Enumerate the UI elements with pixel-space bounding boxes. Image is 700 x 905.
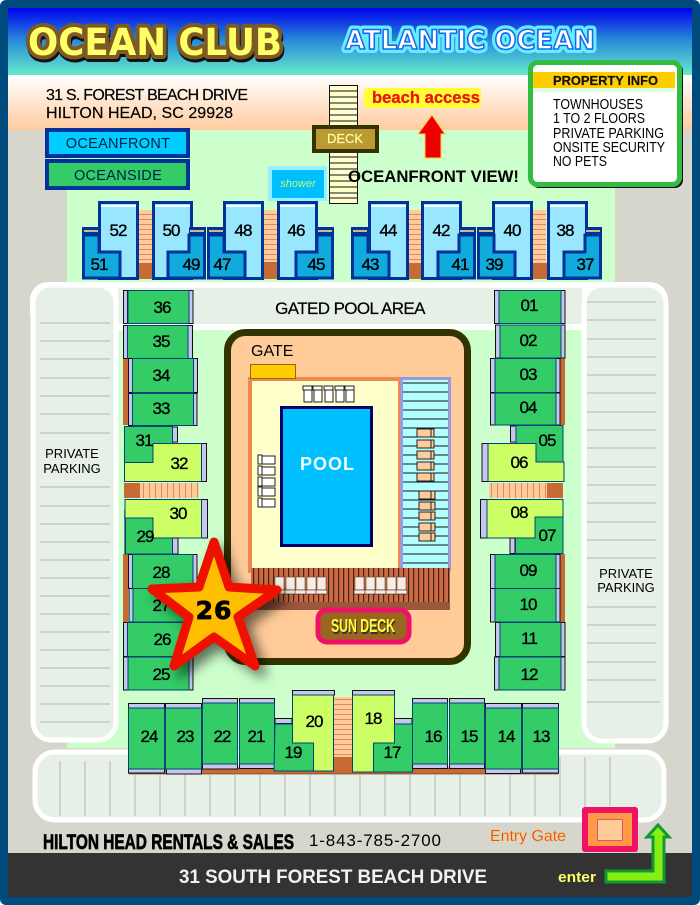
loungers: right bbox=[417, 429, 435, 541]
units 52 and 51: 51 bbox=[91, 255, 108, 274]
unit 20 bbox=[292, 690, 334, 771]
unit 26: 26 bbox=[154, 630, 171, 649]
unit 15 bbox=[450, 698, 484, 768]
units 38 and 37: 37 bbox=[577, 255, 594, 274]
water feature strip bbox=[402, 378, 450, 570]
unit 07 bbox=[510, 517, 563, 554]
units 42 and 41: 41 bbox=[452, 255, 469, 274]
heading: Atlantic Ocean: ATLANTIC OCEAN bbox=[345, 25, 595, 56]
legend: oceanside bbox=[47, 161, 188, 188]
unit 13 bbox=[522, 704, 558, 773]
unit 01: 01 bbox=[521, 296, 538, 315]
unit 14 bbox=[486, 704, 522, 774]
star marker: unit 26 bbox=[152, 542, 277, 666]
right column units bbox=[480, 290, 565, 690]
pool: POOL bbox=[300, 454, 354, 474]
unit 06: 06 bbox=[511, 453, 528, 472]
left private parking: PARKING bbox=[43, 461, 101, 476]
unit 13: 13 bbox=[533, 727, 550, 746]
unit 05: 05 bbox=[539, 431, 556, 450]
unit 15: 15 bbox=[461, 727, 478, 746]
panel: property info: 1 TO 2 FLOORS bbox=[553, 110, 645, 127]
units 46 and 45: 46 bbox=[288, 221, 305, 240]
units 50 and 49: 49 bbox=[183, 255, 200, 274]
title: Ocean Club: OCEAN CLUB bbox=[28, 21, 282, 64]
unit 28 bbox=[128, 554, 197, 588]
right private parking: PARKING bbox=[597, 580, 655, 595]
unit 34: 34 bbox=[153, 366, 170, 385]
unit 11 bbox=[496, 622, 565, 656]
unit 17: 17 bbox=[384, 743, 401, 762]
unit 23 bbox=[166, 704, 202, 774]
unit 32 bbox=[124, 444, 206, 482]
unit 31 bbox=[124, 426, 178, 462]
sun deck sign: SUN DECK bbox=[332, 618, 396, 638]
unit 36: 36 bbox=[154, 298, 171, 317]
unit 02: 02 bbox=[520, 331, 537, 350]
unit 25: 25 bbox=[153, 665, 170, 684]
unit 01 bbox=[494, 290, 565, 324]
unit 17 bbox=[374, 718, 412, 772]
unit 33 bbox=[128, 394, 197, 426]
unit 12: 12 bbox=[521, 665, 538, 684]
company name: HILTON HEAD RENTALS & SALES bbox=[43, 831, 294, 854]
legend: oceanfront bbox=[47, 130, 188, 156]
gated pool area band bbox=[30, 282, 668, 330]
unit 16: 16 bbox=[425, 727, 442, 746]
unit 24: 24 bbox=[141, 727, 158, 746]
deck sign: DECK bbox=[327, 131, 363, 146]
panel: property info: PROPERTY INFO bbox=[553, 74, 658, 88]
boardwalk bbox=[330, 86, 358, 204]
deck sign bbox=[314, 127, 377, 151]
units 50 and 49 bbox=[154, 202, 206, 278]
unit 32: 32 bbox=[171, 454, 188, 473]
unit 14: 14 bbox=[498, 727, 515, 746]
unit 19 bbox=[274, 718, 314, 771]
unit 28: 28 bbox=[153, 563, 170, 582]
loungers: top bbox=[303, 386, 354, 402]
panel: property info bbox=[530, 62, 683, 188]
address bbox=[46, 87, 248, 122]
unit 02 bbox=[496, 325, 565, 358]
unit 21: 21 bbox=[248, 727, 265, 746]
units 44 and 43: 44 bbox=[380, 221, 397, 240]
gate label bbox=[250, 343, 296, 378]
unit 04: 04 bbox=[520, 398, 537, 417]
units 48 and 47 bbox=[207, 202, 262, 278]
panel: property info: TOWNHOUSES bbox=[553, 96, 643, 113]
entry gate label: Entry Gate bbox=[490, 828, 566, 845]
phone number: 1-843-785-2700 bbox=[309, 831, 441, 850]
unit 03 bbox=[490, 358, 560, 392]
unit 23: 23 bbox=[177, 727, 194, 746]
gated pool area band: GATED POOL AREA bbox=[275, 299, 426, 318]
unit 35: 35 bbox=[153, 332, 170, 351]
wooden deck bbox=[251, 568, 450, 610]
unit 26 bbox=[124, 622, 188, 656]
heading: Atlantic Ocean: ATLANTIC OCEAN bbox=[345, 25, 595, 56]
beach gradient band bbox=[8, 75, 692, 130]
unit 20: 20 bbox=[306, 712, 323, 731]
units 44 and 43: 43 bbox=[362, 255, 379, 274]
address: HILTON HEAD, SC 29928 bbox=[46, 105, 233, 122]
icon: red arrow bbox=[418, 115, 445, 158]
panel: property info: NO PETS bbox=[553, 153, 607, 170]
units 50 and 49: 50 bbox=[163, 221, 180, 240]
unit 36 bbox=[124, 290, 193, 324]
left private parking bbox=[33, 285, 116, 740]
legend: oceanside: OCEANSIDE bbox=[74, 168, 162, 184]
unit 18 bbox=[352, 690, 394, 772]
unit 06 bbox=[482, 444, 564, 482]
unit 08: 08 bbox=[511, 503, 528, 522]
unit 10 bbox=[490, 588, 560, 622]
bottom road bar bbox=[8, 853, 692, 897]
bottom parking lot bbox=[35, 752, 664, 820]
unit 25 bbox=[124, 657, 193, 690]
right private parking: PRIVATE bbox=[599, 566, 653, 581]
unit 05 bbox=[510, 426, 563, 462]
units 40 and 39: 39 bbox=[486, 255, 503, 274]
unit 12 bbox=[494, 657, 565, 690]
bottom row units bbox=[128, 690, 558, 774]
pool bbox=[282, 408, 372, 546]
pool compound bbox=[228, 332, 468, 662]
gate label: GATE bbox=[251, 343, 293, 360]
units 38 and 37 bbox=[548, 202, 602, 278]
road name: 31 SOUTH FOREST BEACH DRIVE bbox=[179, 867, 487, 888]
left private parking: PRIVATE bbox=[45, 446, 99, 461]
unit 09 bbox=[490, 554, 560, 588]
ocean gradient band bbox=[8, 8, 692, 75]
top row stairs bbox=[139, 210, 547, 279]
units 52 and 51 bbox=[82, 202, 138, 278]
units 48 and 47: 47 bbox=[214, 255, 231, 274]
unit 22 bbox=[202, 698, 238, 769]
sun deck sign: SUN DECK bbox=[331, 616, 395, 636]
property lawn bbox=[67, 130, 615, 748]
loungers: left bbox=[258, 455, 275, 507]
units 44 and 43 bbox=[351, 202, 408, 278]
panel: property info: PRIVATE PARKING bbox=[553, 125, 664, 142]
shower sign bbox=[268, 166, 327, 201]
unit 31: 31 bbox=[136, 431, 153, 450]
stairs between 30 and 32 bbox=[124, 483, 199, 498]
unit 07: 07 bbox=[539, 526, 556, 545]
unit 09: 09 bbox=[520, 561, 537, 580]
units 40 and 39: 40 bbox=[504, 221, 521, 240]
unit 29: 29 bbox=[137, 527, 154, 546]
unit 27: 27 bbox=[153, 596, 170, 615]
sun deck sign bbox=[318, 610, 409, 642]
unit 33: 33 bbox=[153, 399, 170, 418]
unit 18: 18 bbox=[365, 709, 382, 728]
pool terrace bbox=[250, 379, 400, 571]
left column units bbox=[123, 290, 208, 690]
unit 22: 22 bbox=[214, 727, 231, 746]
unit 19: 19 bbox=[285, 743, 302, 762]
entry gate icon bbox=[582, 807, 638, 852]
address: 31 S. FOREST BEACH DRIVE bbox=[46, 87, 248, 104]
units 42 and 41 bbox=[422, 202, 476, 278]
unit 04 bbox=[490, 393, 560, 425]
unit 24 bbox=[128, 704, 164, 773]
enter label: enter bbox=[558, 869, 596, 886]
star marker: unit 26: 26 bbox=[196, 596, 232, 625]
shower sign: shower bbox=[280, 178, 317, 190]
legend: oceanfront: OCEANFRONT bbox=[66, 136, 170, 152]
unit 08 bbox=[480, 500, 563, 538]
units 46 and 45: 45 bbox=[308, 255, 325, 274]
beach access label: beach access bbox=[372, 88, 480, 107]
unit 30 bbox=[125, 500, 208, 538]
grey ground bbox=[8, 130, 692, 854]
unit 30: 30 bbox=[170, 504, 187, 523]
panel: property info: ONSITE SECURITY bbox=[553, 139, 665, 156]
icon: green enter arrow bbox=[606, 825, 669, 882]
unit 29 bbox=[126, 518, 178, 554]
stairs between 18 and 20 bbox=[334, 697, 352, 771]
unit 10: 10 bbox=[520, 595, 537, 614]
title: Ocean Club: OCEAN CLUB bbox=[29, 24, 283, 67]
right private parking bbox=[584, 285, 666, 741]
units 42 and 41: 42 bbox=[433, 221, 450, 240]
unit 11: 11 bbox=[521, 629, 537, 648]
stairs between 06 and 08 bbox=[489, 483, 563, 498]
units 38 and 37: 38 bbox=[557, 221, 574, 240]
oceanfront view text: OCEANFRONT VIEW! bbox=[348, 168, 519, 186]
units 40 and 39 bbox=[477, 202, 532, 278]
unit 16 bbox=[412, 698, 448, 768]
unit 27 bbox=[129, 588, 193, 622]
units 48 and 47: 48 bbox=[235, 221, 252, 240]
units 52 and 51: 52 bbox=[110, 221, 127, 240]
unit 34 bbox=[128, 358, 198, 392]
unit 21 bbox=[240, 698, 276, 768]
units 46 and 45 bbox=[278, 202, 334, 278]
unit 35 bbox=[124, 326, 192, 358]
unit 03: 03 bbox=[520, 365, 537, 384]
